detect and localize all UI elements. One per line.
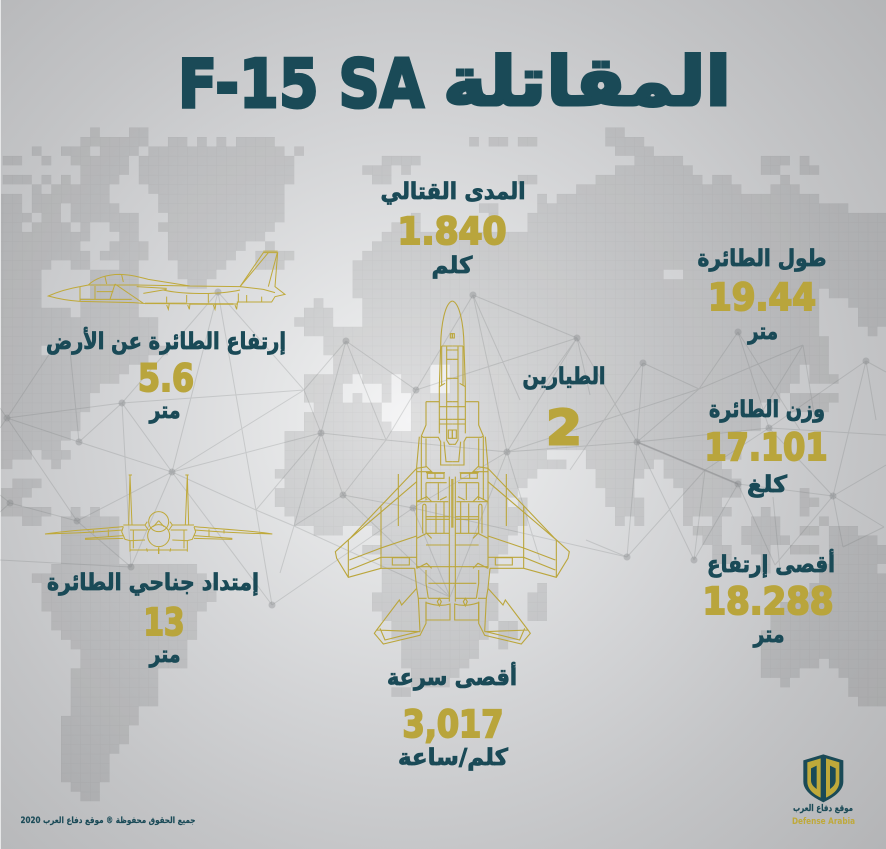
stat: aircraft height: 5.6 <box>138 357 194 400</box>
icon: side view jet <box>48 251 285 309</box>
stat: aircraft length: طول الطائرة <box>698 246 826 272</box>
stat: aircraft weight: 17.101 <box>704 426 828 469</box>
stat: pilots: 2 <box>546 401 582 456</box>
icon: top view jet <box>335 301 569 644</box>
stat: maximum altitude: أقصى إرتفاع <box>707 548 835 578</box>
stat: aircraft height: متر <box>149 398 180 424</box>
stat: pilots <box>522 364 606 456</box>
title <box>178 43 731 123</box>
stat: maximum speed <box>387 661 517 771</box>
stat: maximum altitude: متر <box>753 622 784 648</box>
stat: combat range <box>380 179 526 279</box>
stat: combat range: 1.840 <box>398 210 506 253</box>
stat: wingspan <box>47 570 259 668</box>
network lines and nodes <box>0 288 886 608</box>
stat: aircraft length <box>698 246 826 345</box>
stat: pilots: الطيارين <box>522 364 606 390</box>
stat: aircraft weight: وزن الطائرة <box>709 397 825 423</box>
stat: maximum altitude <box>702 548 835 648</box>
stat: aircraft height <box>46 326 286 424</box>
stat: combat range: المدى القتالي <box>380 179 526 205</box>
logo: Defense Arabia: موقع دفاع العرب <box>793 804 853 814</box>
stat: wingspan: 13 <box>144 601 184 644</box>
logo: Defense Arabia <box>792 754 855 827</box>
stat: maximum speed: أقصى سرعة <box>387 661 517 691</box>
stat: maximum speed: 3,017 <box>402 703 504 746</box>
footer copyright: جميع الحقوق محفوظة ® موقع دفاع العرب 2020 <box>21 816 196 826</box>
left edge strip <box>0 0 1 849</box>
stat: maximum speed: كلم/ساعة <box>398 745 509 771</box>
title: F-15 SA <box>178 45 424 123</box>
stat: aircraft weight: كلغ <box>747 472 788 498</box>
stat: aircraft height: إرتفاع الطائرة عن الأرض <box>46 326 286 355</box>
stat: aircraft length: متر <box>747 319 778 345</box>
stat: wingspan: إمتداد جناحي الطائرة <box>47 570 259 596</box>
icon: front view jet <box>45 475 272 554</box>
stat: aircraft length: 19.44 <box>708 276 816 319</box>
stat: wingspan: متر <box>149 642 180 668</box>
stat: maximum altitude: 18.288 <box>702 580 834 623</box>
logo: Defense Arabia: Defense Arabia <box>792 817 855 827</box>
background world map <box>0 127 886 801</box>
stat: aircraft weight <box>704 397 828 498</box>
stat: combat range: كلم <box>432 253 473 279</box>
title: المقاتلة <box>443 43 731 122</box>
